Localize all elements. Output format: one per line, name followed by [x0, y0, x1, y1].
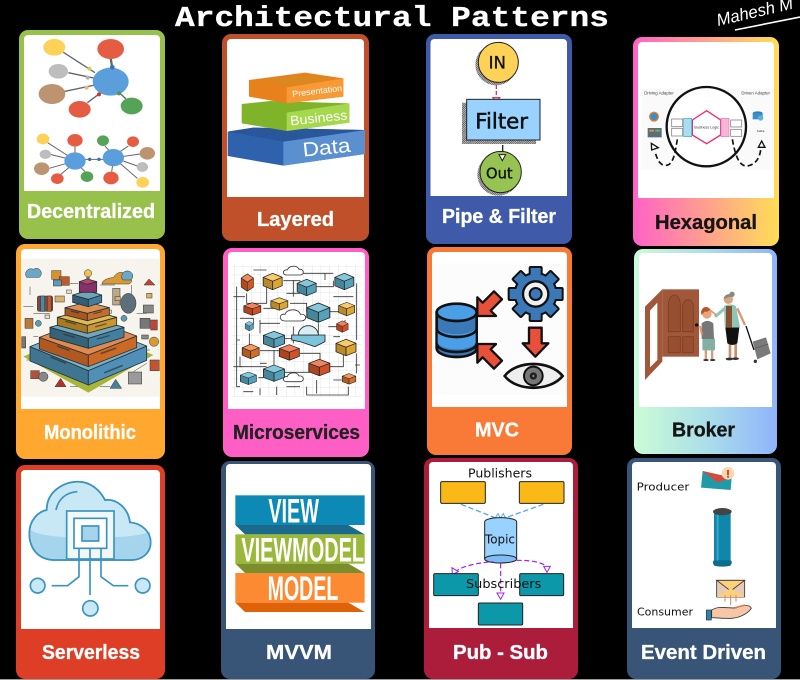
- diagram: layer stack: Data: [302, 135, 353, 162]
- label: Hexagonal: [655, 212, 757, 234]
- label: Event Driven: [641, 642, 766, 664]
- icon: model database: [437, 304, 477, 357]
- diagram: hexagonal architecture: Driving Adapter: [644, 90, 674, 95]
- surrounding clutter: [22, 268, 159, 388]
- label: Pub - Sub: [453, 642, 548, 664]
- illustration: open door with broker and visitor: [645, 289, 771, 380]
- diagram: pipe and filter flow: IN: [489, 53, 506, 72]
- diagram: publishers, topic and subscribers: Topic: [484, 532, 515, 547]
- icon: view eye: [505, 364, 563, 388]
- panel: MVC: [427, 247, 572, 455]
- label: MVVM: [266, 642, 332, 664]
- label: Decentralized: [27, 201, 155, 223]
- illustration: microservices map: [232, 265, 362, 397]
- panel: Decentralized: [19, 30, 165, 239]
- diagram: publishers, topic and subscribers: [434, 466, 564, 625]
- diagram: model view controller icons: [432, 263, 567, 395]
- icon: serverless cloud chip: [29, 482, 151, 616]
- woman: [710, 292, 745, 360]
- diagram: pipe and filter flow: Filter: [475, 109, 528, 134]
- panel: MVVM: [221, 461, 375, 679]
- diagram: hexagonal architecture: [642, 87, 773, 170]
- label: Pipe & Filter: [442, 206, 556, 228]
- icon: controller gear: [510, 268, 562, 320]
- label: Microservices: [233, 422, 360, 444]
- panel: Broker: [634, 249, 777, 454]
- suitcase: [746, 326, 771, 363]
- panel: Event Driven: [627, 458, 781, 679]
- label: Broker: [672, 420, 735, 442]
- diagram: publishers, topic and subscribers: Publishers: [468, 466, 532, 481]
- diagram: hexagonal architecture: Business Logic: [694, 126, 719, 130]
- icon: consumer envelope and hand: [706, 580, 751, 620]
- label: Layered: [257, 209, 334, 231]
- diagram: decentralized network: [34, 39, 155, 188]
- diagram: MVVM stacked bands: VIEW: [268, 492, 320, 530]
- diagram: producer, pipe and consumer: [637, 467, 751, 620]
- diagram: pipe and filter flow: Out: [486, 166, 513, 183]
- label: Monolithic: [44, 422, 136, 444]
- boy: [700, 307, 715, 361]
- illustration: monolith pyramid: [21, 259, 159, 397]
- panel: Microservices: [223, 248, 369, 457]
- diagram: producer, pipe and consumer: Consumer: [637, 606, 693, 619]
- diagram: MVVM stacked bands: VIEWMODEL: [241, 531, 364, 569]
- icon: event pipe: [713, 508, 732, 567]
- diagram: hexagonal architecture: Kafka: [757, 129, 765, 133]
- diagram: publishers, topic and subscribers: Subscribers: [466, 576, 541, 591]
- panel: Pub-Sub: [424, 458, 578, 679]
- diagram: MVVM stacked bands: MODEL: [268, 570, 338, 608]
- diagram: layer stack: [228, 73, 365, 166]
- diagram: hexagonal architecture: Driven Adapter: [741, 90, 771, 95]
- label: MVC: [475, 420, 519, 442]
- diagram: layer stack: Presentation: [292, 83, 343, 99]
- diagram: layer stack: Business: [289, 107, 348, 128]
- diagram: pipe and filter flow: [462, 42, 540, 196]
- panel: Layered: [222, 34, 369, 241]
- diagram: producer, pipe and consumer: Producer: [637, 480, 690, 493]
- panel: Monolithic: [16, 244, 165, 459]
- title: Architectural Patterns: [175, 2, 609, 35]
- panel: Hexagonal: [633, 37, 779, 246]
- icon: producer envelope: [701, 467, 734, 490]
- panel: Serverless: [16, 465, 165, 679]
- label: Serverless: [42, 642, 140, 664]
- arrows: [477, 291, 548, 369]
- panel: Pipe and Filter: [426, 34, 572, 244]
- diagram: MVVM stacked bands: [235, 492, 365, 612]
